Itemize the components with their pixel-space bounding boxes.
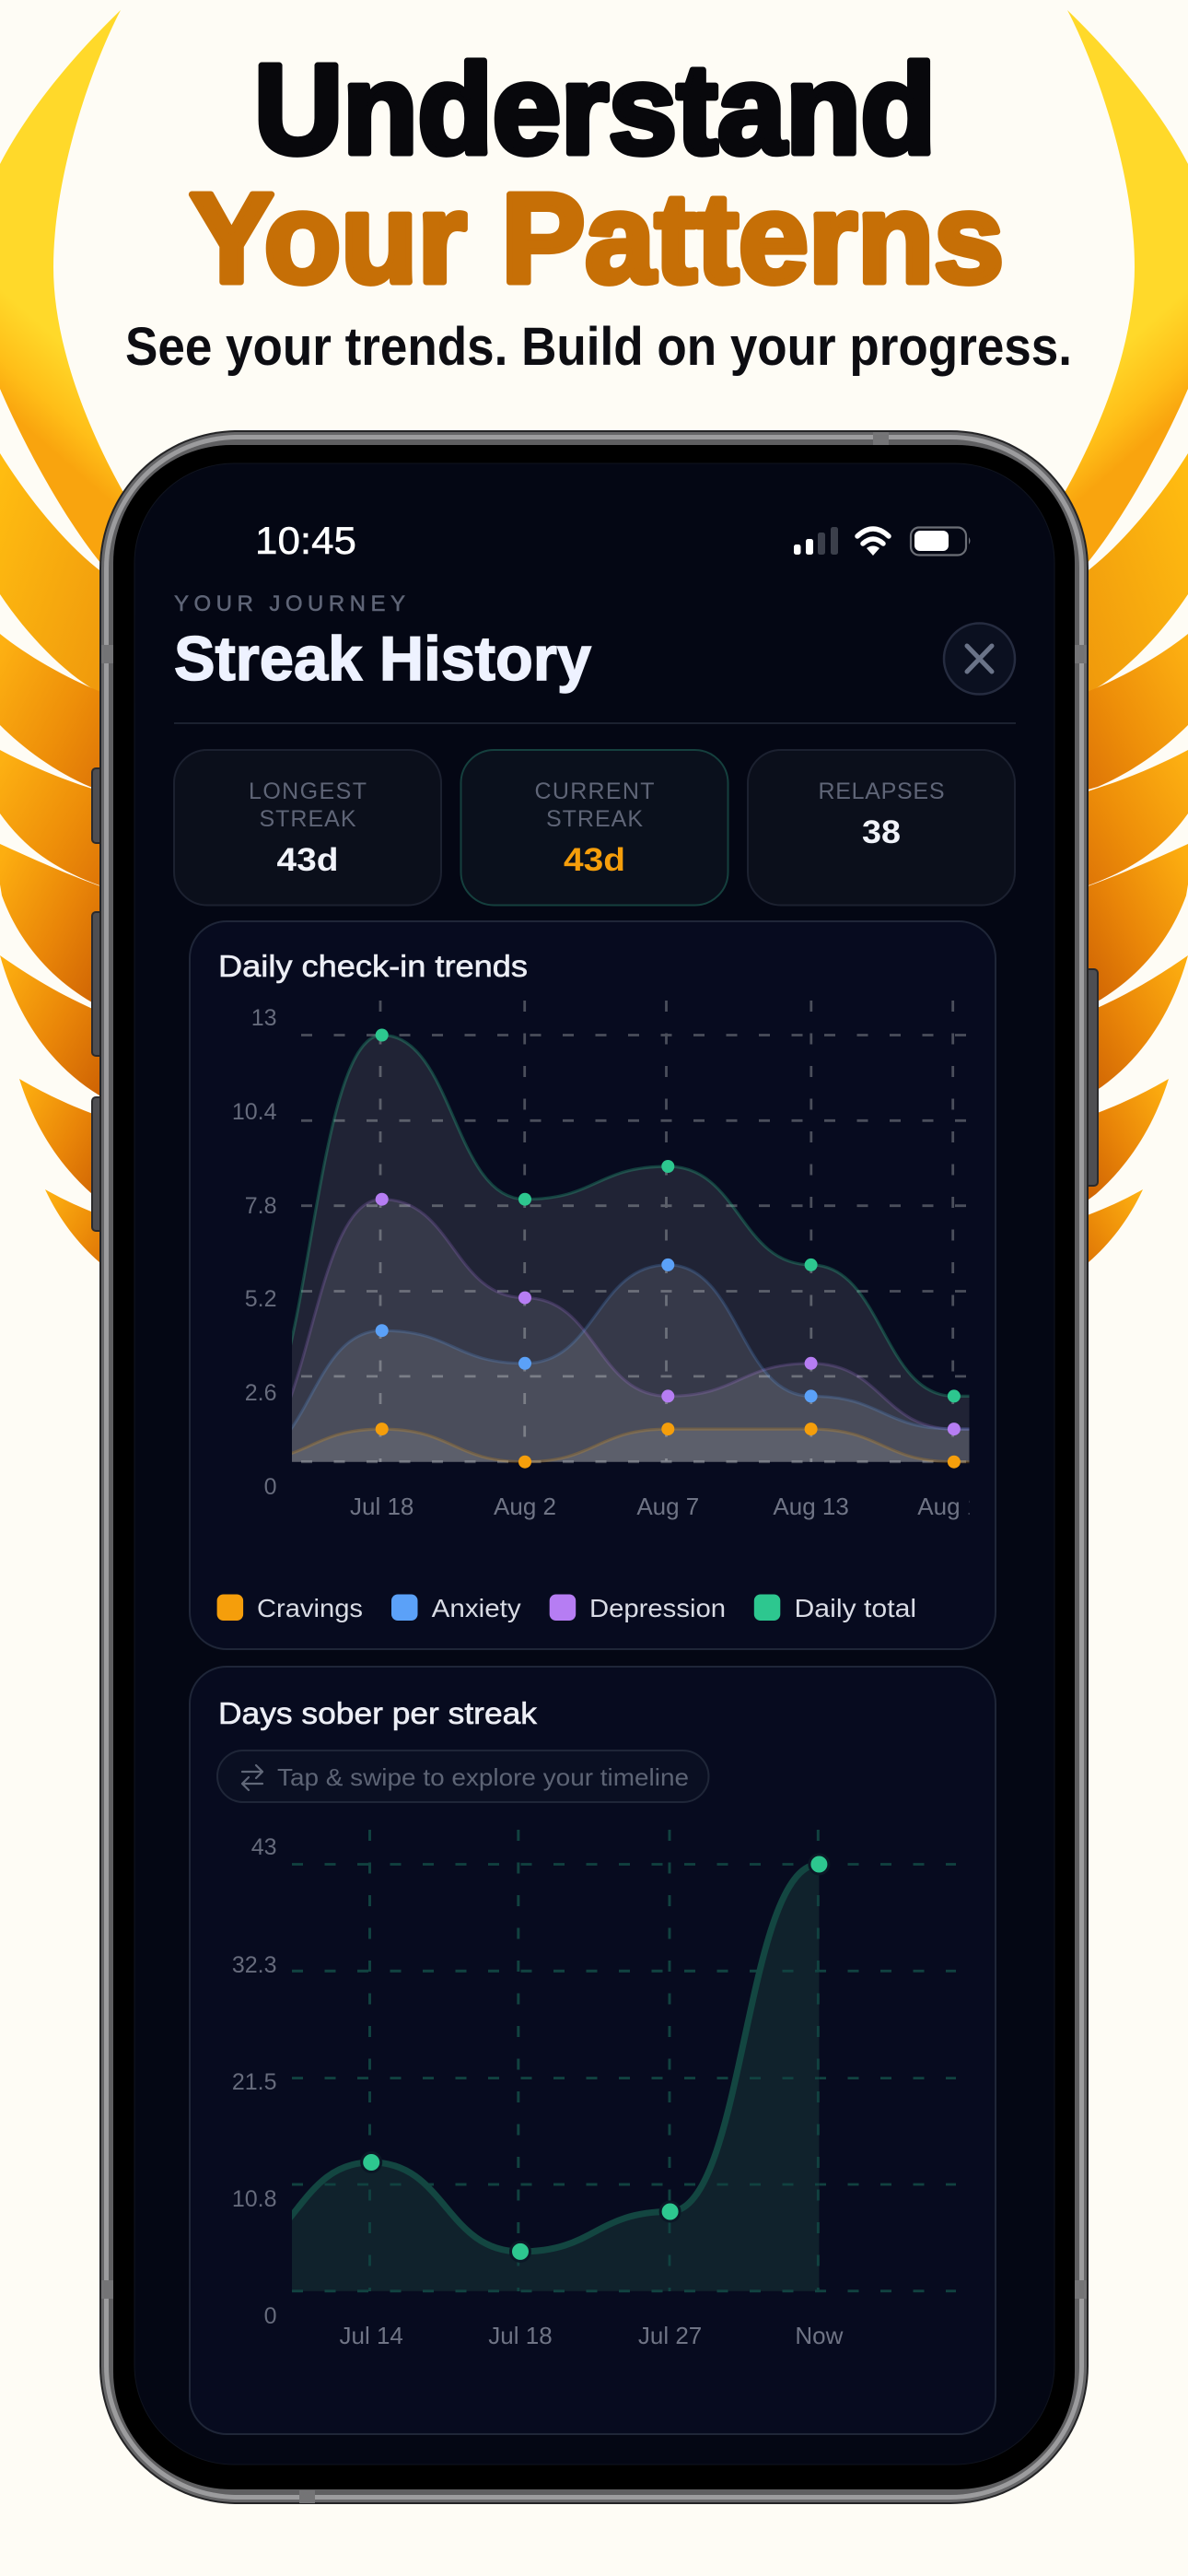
legend (217, 1594, 916, 1622)
y axis labels (232, 1005, 277, 1500)
antenna bands (101, 432, 1087, 2503)
x axis labels: Jul 18 (350, 1493, 413, 1520)
x axis labels: Aug 7 (636, 1493, 699, 1520)
icon: right golden wing (1059, 10, 1188, 1264)
stat: longest streak: LONGEST (249, 779, 367, 804)
icon: left golden wing (0, 10, 129, 1264)
y axis labels: 13 (251, 1005, 276, 1031)
chart title: Daily check-in trends (218, 949, 528, 983)
stat: current streak: STREAK (546, 806, 643, 832)
legend: Cravings (257, 1594, 363, 1622)
legend: Anxiety (432, 1594, 521, 1622)
panel: days sober per streak (190, 1667, 996, 2434)
status bar time: 10:45 (255, 519, 356, 562)
data points: cravings (376, 1423, 961, 1469)
x axis labels: Aug 13 (773, 1493, 849, 1520)
x axis labels: Jul 27 (638, 2322, 702, 2349)
y axis labels: 43 (251, 1834, 276, 1860)
icon: wifi (857, 529, 889, 556)
screen (134, 463, 1054, 2465)
icon: battery (911, 527, 971, 555)
area chart (292, 1001, 969, 1469)
stat: current streak: 43d (564, 842, 625, 878)
y axis labels: 10.8 (232, 2186, 276, 2212)
stat: longest streak: 43d (276, 842, 339, 878)
title: Understand: Understand (254, 39, 936, 181)
stat: longest streak: STREAK (260, 806, 356, 832)
legend: Depression (589, 1594, 726, 1622)
panel: daily check-in trends (189, 920, 996, 1650)
hint pill: Tap & swipe to explore your timeline (277, 1763, 689, 1791)
x axis labels: Jul 14 (340, 2322, 403, 2349)
black bezel (113, 445, 1075, 2489)
y axis labels: 0 (264, 1474, 276, 1500)
subtitle: See your trends. Build on your progress. (125, 317, 1072, 377)
y axis labels (232, 1834, 276, 2329)
x axis labels: Aug 2 (494, 1493, 556, 1520)
data points: daily total (376, 1028, 961, 1402)
icon: signal bars (794, 527, 838, 555)
phone mockup (92, 430, 1098, 2504)
y axis labels: 7.8 (245, 1193, 276, 1219)
legend: Daily total (794, 1594, 916, 1622)
area chart (222, 1830, 956, 2291)
stat: current streak: CURRENT (534, 779, 654, 804)
stat: longest streak (174, 750, 441, 905)
x axis labels (340, 2322, 844, 2349)
x axis labels: Aug 19 (917, 1493, 994, 1520)
data points: anxiety (376, 1259, 818, 1402)
x axis labels: Now (795, 2322, 844, 2349)
y axis labels: 5.2 (245, 1286, 276, 1312)
stat: relapses: 38 (862, 814, 901, 850)
side buttons (92, 768, 1098, 1231)
hint pill (217, 1751, 709, 1802)
y axis labels: 2.6 (245, 1380, 276, 1406)
y axis labels: 0 (264, 2303, 276, 2329)
stat: relapses: RELAPSES (818, 779, 945, 804)
steel frame (99, 430, 1089, 2504)
x axis labels (350, 1497, 969, 1520)
x axis labels: Jul 18 (488, 2322, 553, 2349)
divider (174, 722, 1016, 724)
y axis labels: 10.4 (232, 1099, 277, 1125)
close button (944, 623, 1015, 695)
y axis labels: 32.3 (232, 1952, 276, 1978)
stat: relapses (748, 750, 1015, 905)
eyebrow label: YOUR JOURNEY (174, 591, 405, 616)
data points: depression (376, 1193, 961, 1435)
title: Your Patterns: Your Patterns (190, 168, 1004, 310)
chart title: Days sober per streak (218, 1696, 538, 1730)
data points (362, 1855, 829, 2261)
screen heading: Streak History (174, 624, 591, 694)
y axis labels: 21.5 (232, 2069, 276, 2095)
stat: current streak (460, 750, 728, 905)
